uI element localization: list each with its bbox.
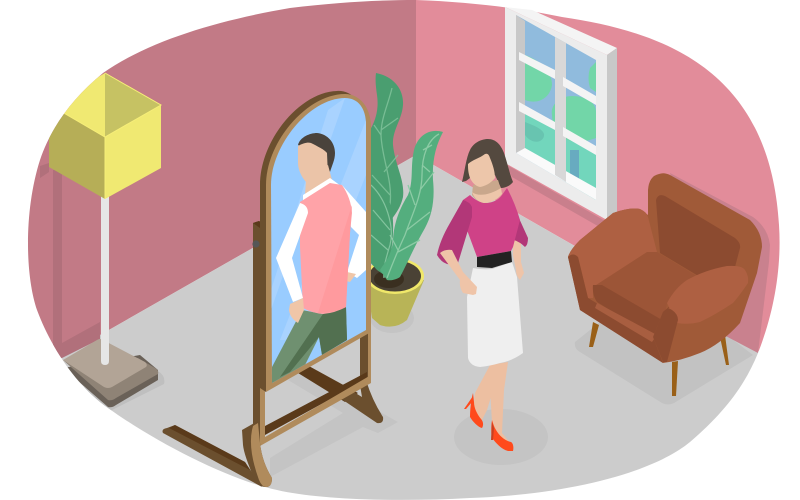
left wall [28, 0, 416, 358]
pot soil [369, 260, 421, 292]
chair body [568, 173, 762, 363]
knob [252, 240, 260, 248]
trees through window [525, 55, 596, 200]
reflection left hand [289, 298, 304, 323]
front leaf [380, 131, 443, 280]
front foot beam top [169, 425, 250, 470]
lamp pole [101, 190, 109, 365]
lower left leaf [368, 183, 393, 278]
rear foot beam [298, 365, 358, 402]
window [505, 7, 617, 220]
lamp base [63, 339, 158, 407]
lamp [49, 73, 161, 407]
chair front post [653, 309, 678, 362]
right wall [416, 0, 780, 352]
reflection right leg [280, 307, 347, 377]
reflection vest [300, 183, 352, 314]
window mullion vertical [555, 37, 566, 182]
woman [437, 139, 528, 451]
reflection face [298, 143, 328, 183]
lamp wall shadow [40, 163, 100, 358]
window frame [505, 7, 607, 220]
face [468, 154, 495, 187]
chair back legs [589, 322, 729, 365]
reflection right hand [348, 272, 356, 282]
armchair floor shadow [575, 323, 752, 404]
left arm [440, 250, 477, 295]
reflection hair [298, 133, 335, 172]
armchair [568, 173, 762, 396]
cushion strip [595, 303, 657, 342]
mirror glass [271, 98, 366, 383]
reflection left sleeve [276, 203, 308, 302]
rear foot curve [340, 380, 383, 423]
hair back [462, 139, 513, 188]
armchair wall shadow [670, 173, 770, 353]
back leg [473, 365, 500, 420]
vest shade [318, 205, 352, 313]
mirror floor shadow [270, 372, 398, 477]
floor [61, 157, 758, 500]
window mullions horizontal [519, 52, 596, 155]
left sleeve [437, 200, 472, 264]
front post [253, 221, 265, 443]
belt [477, 251, 512, 268]
reflection [271, 98, 366, 383]
window side face [607, 48, 617, 220]
rear post [360, 330, 371, 386]
window reveal left [516, 15, 525, 153]
cross bar [260, 372, 371, 446]
pot soil centre [374, 270, 404, 288]
cushion front [593, 285, 670, 337]
right arm [513, 236, 524, 280]
skirt [467, 262, 523, 367]
pot body [366, 280, 424, 327]
woman floor shadow [469, 410, 533, 417]
front shoe [491, 420, 513, 451]
lamp floor shadow [84, 372, 164, 410]
reflection collar [303, 178, 339, 200]
window top face [505, 7, 617, 55]
back shoe [464, 393, 483, 428]
chair front leg [672, 361, 678, 396]
front curved leg [242, 422, 272, 487]
reflection neck [305, 165, 332, 195]
front leg [490, 362, 510, 443]
chair front lower [568, 254, 663, 363]
pot rim [366, 258, 424, 294]
chair left arm [568, 208, 657, 298]
chair inner back [656, 195, 740, 277]
plant [365, 73, 443, 327]
lamp shade [49, 73, 161, 199]
window sky pane [516, 15, 596, 200]
front foot beam [162, 425, 262, 487]
mirror [162, 91, 383, 487]
window wall shadow [507, 165, 607, 229]
glass highlights [271, 98, 366, 340]
right sleeve [514, 216, 528, 247]
neck [472, 180, 502, 203]
chair right arm [667, 266, 748, 324]
reflection right sleeve [342, 185, 366, 278]
back leaf [365, 73, 403, 222]
chest [472, 188, 502, 203]
chair seat cushion [593, 252, 700, 327]
window sill reveal [516, 148, 596, 200]
reflection left leg [272, 307, 347, 383]
pot floor shadow [372, 312, 412, 331]
blouse [463, 188, 520, 257]
mirror frame [266, 94, 371, 392]
mirror frame side [260, 91, 371, 392]
